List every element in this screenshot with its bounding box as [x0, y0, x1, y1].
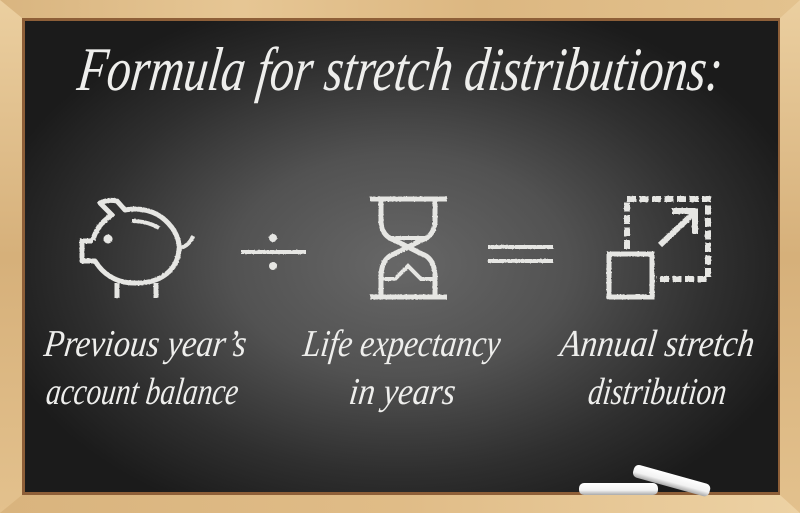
- icon: hourglass: [370, 199, 447, 297]
- caption: annual stretch distribution: [555, 323, 757, 413]
- caption: previous year's account balance: account balance: [44, 371, 241, 413]
- caption: previous year's account balance: Previous year’s: [41, 323, 249, 365]
- icon: expand square: [609, 199, 708, 297]
- equals sign: [488, 245, 553, 263]
- caption: previous year's account balance: [41, 323, 249, 413]
- caption: life expectancy in years: in years: [347, 371, 458, 413]
- chalk sticks: [579, 464, 711, 497]
- caption: life expectancy in years: [300, 323, 503, 413]
- caption: life expectancy in years: Life expectancy: [300, 323, 503, 365]
- icon: piggy bank: [82, 200, 193, 298]
- caption: annual stretch distribution: Annual stretch: [555, 323, 757, 365]
- divide sign: [241, 234, 306, 270]
- caption: annual stretch distribution: distribution: [586, 371, 729, 413]
